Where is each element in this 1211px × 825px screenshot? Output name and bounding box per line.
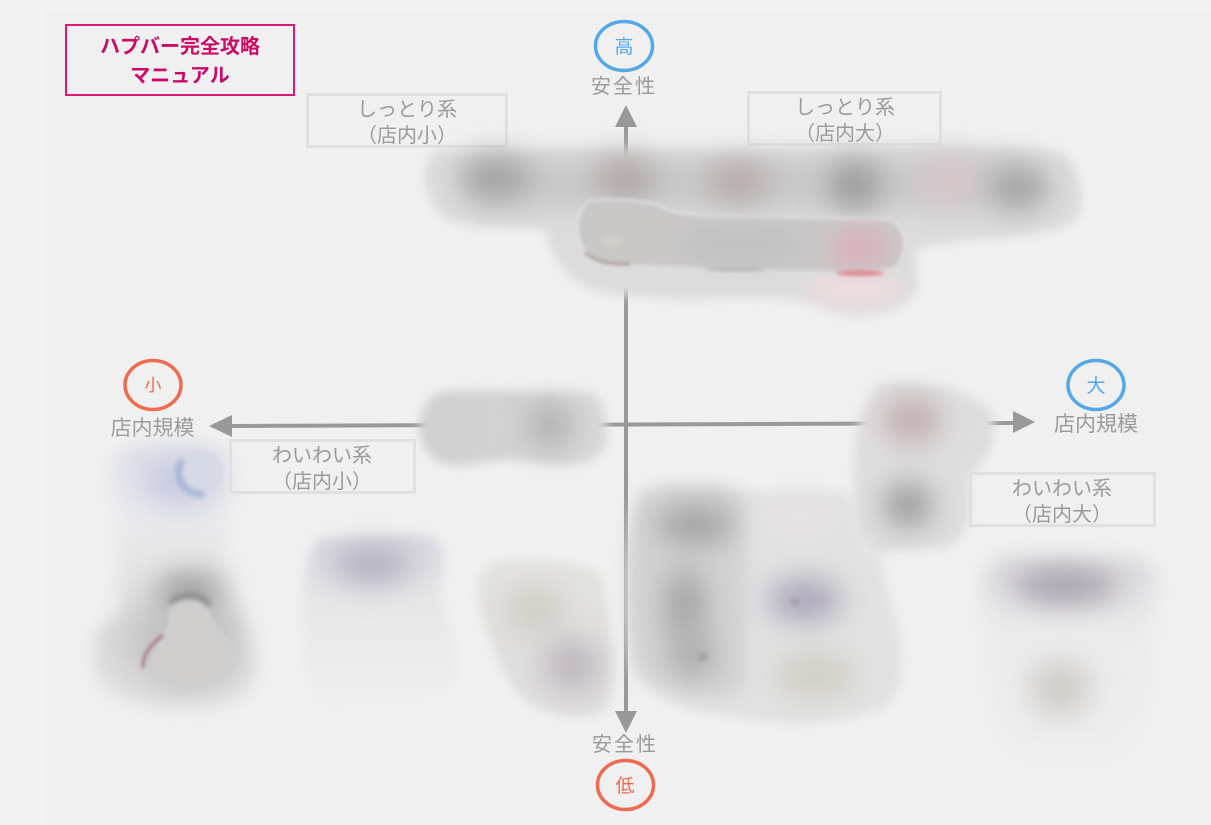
axis label: small store: 小	[144, 376, 162, 395]
axis label: high safety: 安全性	[591, 75, 657, 98]
title box: ハプバー完全攻略	[100, 34, 260, 58]
axis label: small store	[110, 360, 194, 440]
quadrant label: lively small: わいわい系	[272, 444, 372, 467]
blurred logos: top cluster	[425, 147, 1081, 314]
axis label: low safety	[592, 733, 658, 810]
axis label: large store: 店内規模	[1054, 413, 1138, 436]
axis label: low safety: 安全性	[592, 733, 658, 756]
blurred logo: beige and mauve	[478, 560, 612, 717]
quadrant label: moist large	[748, 92, 940, 145]
blurred logo: center left	[419, 391, 607, 465]
axis label: high safety	[591, 22, 657, 98]
blurred logo group: lively large right	[982, 557, 1156, 763]
quadrant label: moist small: しっとり系	[357, 98, 457, 121]
axis label: high safety: 高	[614, 36, 634, 58]
vertical axis arrow	[615, 105, 637, 733]
quadrant label: moist large: しっとり系	[795, 96, 895, 119]
inner pill shape	[578, 199, 904, 272]
quadrant label: moist small	[308, 94, 506, 147]
blurred logo: purple	[302, 535, 457, 708]
quadrant label: moist small: （店内小）	[357, 124, 457, 147]
quadrant label: lively large: わいわい系	[1012, 477, 1112, 500]
quadrant label: lively large	[970, 474, 1154, 526]
quadrant label: lively small	[230, 440, 414, 493]
blurred logo group: blue and pear	[95, 445, 255, 707]
axis label: large store: 大	[1086, 375, 1106, 397]
horizontal axis arrow	[209, 411, 1035, 437]
title box	[66, 25, 294, 95]
blurred logo group: lively large center	[627, 486, 903, 723]
axis label: small store: 店内規模	[110, 417, 194, 440]
quadrant label: moist large: （店内大）	[795, 122, 895, 145]
axis label: large store	[1054, 360, 1138, 436]
blurred logos: right of axis	[854, 383, 994, 555]
axis label: low safety: 低	[615, 775, 635, 797]
quadrant label: lively large: （店内大）	[1012, 503, 1112, 526]
quadrant label: lively small: （店内小）	[272, 470, 372, 493]
title box: マニュアル	[130, 65, 230, 87]
